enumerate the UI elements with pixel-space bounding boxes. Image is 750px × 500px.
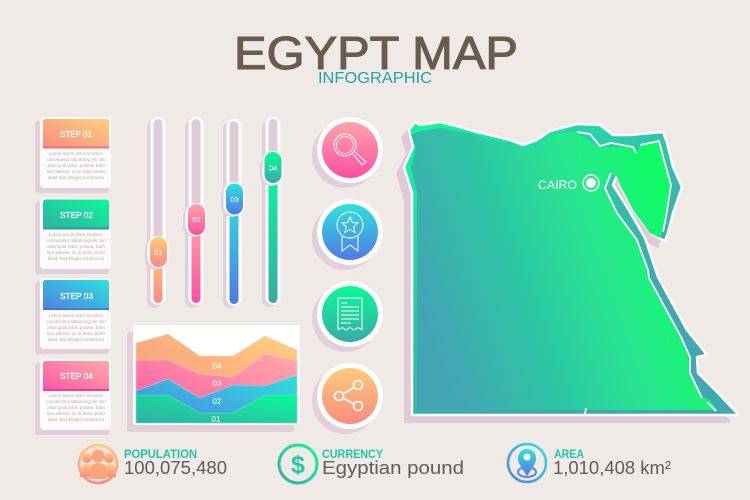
card: step 03: aliud quid voles, postea. Eam <box>47 325 105 330</box>
area 04 <box>136 334 297 423</box>
chart labels: 03 <box>213 379 222 388</box>
card: step 01: aliud quid voles, postea. Eam <box>47 163 105 168</box>
map outline band <box>404 122 737 415</box>
card: step 03: Lorem ipsum dolor sit amet, <box>49 313 103 318</box>
card: step 02: tum adesse, cu m dolor omnis <box>47 250 106 255</box>
area 01 <box>136 395 297 423</box>
slider 03 <box>221 119 244 308</box>
value: population: 100,075,480 <box>124 457 227 478</box>
subtitle: INFOGRAPHIC <box>318 70 432 87</box>
icon: share <box>312 363 383 434</box>
icon: award badge <box>312 199 383 270</box>
card: step 02: consectetur adipiscing elit. Sin <box>46 238 106 243</box>
slider 01: 01 <box>154 248 163 257</box>
slider 02: 02 <box>192 215 201 224</box>
title: EGYPT MAP <box>234 27 518 79</box>
icon: people <box>79 445 117 483</box>
map shadow <box>396 129 730 423</box>
card: step 01: tum adesse, cu m dolor omnis <box>47 169 106 174</box>
card: step 03: consectetur adipiscing elit. Sin <box>46 319 106 324</box>
card: step 02: Lorem ipsum dolor sit amet, <box>49 232 103 237</box>
card: step 01 <box>35 117 111 193</box>
card: step 01: Lorem ipsum dolor sit amet, <box>49 151 103 156</box>
card: step 03: STEP 03 <box>60 291 93 301</box>
card: step 01: consectetur adipiscing elit. Sin <box>46 157 106 162</box>
card: step 04: tum adesse, cu m dolor omnis <box>47 411 106 416</box>
label: area: AREA <box>554 449 584 461</box>
chart labels <box>212 362 222 424</box>
icon: magnifier <box>312 117 383 188</box>
area 03 <box>136 354 297 423</box>
card: step 04: consectetur adipiscing elit. Sin <box>46 399 106 404</box>
card: step 02: absit; Duo Reges constructio <box>48 256 105 261</box>
card: step 04: absit; Duo Reges constructio <box>48 417 105 422</box>
area 02 <box>136 375 297 423</box>
card: step 02 <box>35 198 111 274</box>
label: currency: CURRENCY <box>322 449 383 461</box>
panel: area chart <box>127 325 300 432</box>
card: step 04: Lorem ipsum dolor sit amet, <box>49 393 103 398</box>
card: step 03 <box>35 278 111 354</box>
card: step 02: STEP 02 <box>60 210 93 220</box>
icon: location pin <box>508 444 546 482</box>
chart labels: 02 <box>213 397 222 406</box>
icon: dollar <box>279 445 317 483</box>
label: Cairo: CAIRO <box>538 178 577 192</box>
chart labels: 01 <box>212 415 221 424</box>
card: step 04: STEP 04 <box>60 371 93 381</box>
card: step 04: aliud quid voles, postea. Eam <box>47 405 105 410</box>
panel: circular icons <box>312 117 383 434</box>
card: step 02: aliud quid voles, postea. Eam <box>47 244 105 249</box>
stat: currency <box>279 445 464 483</box>
map inner coast lines <box>577 132 716 414</box>
card: step 01: STEP 01 <box>60 129 92 139</box>
label: Cairo <box>538 175 599 192</box>
card: step 01: absit; Duo Reges constructio <box>48 175 105 180</box>
slider 02 <box>183 117 206 308</box>
panel: vertical sliders <box>145 117 284 308</box>
icon: dollar: $ <box>291 451 305 479</box>
label: population: POPULATION <box>124 449 197 461</box>
slider 01 <box>145 117 168 308</box>
value: area: 1,010,408 km² <box>553 457 671 478</box>
card: step 04 <box>35 359 111 435</box>
icon: receipt <box>312 281 383 352</box>
map fill <box>411 128 717 410</box>
stat: population <box>79 445 227 483</box>
value: currency: Egyptian pound <box>322 457 464 478</box>
slider 04: 04 <box>269 164 277 172</box>
slider 04 <box>260 117 284 307</box>
map of Egypt <box>396 122 737 423</box>
panel: step cards <box>35 117 111 435</box>
card: step 03: tum adesse, cu m dolor omnis <box>47 331 106 336</box>
chart labels: 04 <box>213 362 222 371</box>
slider 03: 03 <box>230 195 239 204</box>
stat: area <box>508 444 671 482</box>
card: step 03: absit; Duo Reges constructio <box>48 337 105 342</box>
